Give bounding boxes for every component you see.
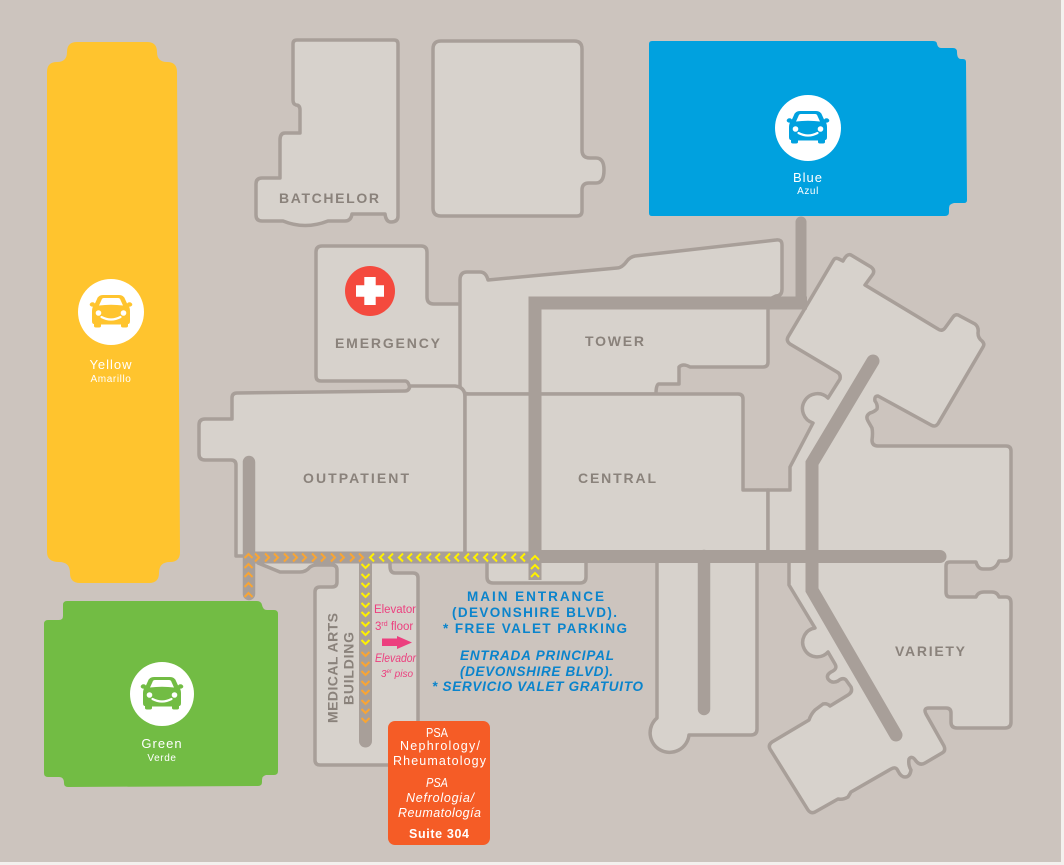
elevator directions: Elevator [374, 604, 416, 616]
callout: PSA suite: PSA [426, 776, 448, 790]
building: Tower [460, 240, 782, 394]
building: Central [465, 394, 768, 556]
callout: PSA suite: Nephrology/ [400, 739, 481, 753]
main entrance text: English: * FREE VALET PARKING [443, 621, 627, 636]
building: Batchelor [256, 40, 398, 226]
elevator directions: rd [381, 621, 388, 628]
main entrance text: English: MAIN ENTRANCE [467, 589, 604, 604]
parking: Green [44, 601, 278, 787]
parking: Blue [649, 41, 967, 216]
label: Amarillo: Amarillo [91, 374, 131, 385]
icon: yellow car [78, 279, 144, 345]
main entrance text: Spanish: * SERVICIO VALET GRATUITO [432, 679, 643, 694]
label: Green: Green [141, 736, 183, 751]
callout: PSA suite: Nefrologia/ [406, 791, 476, 805]
callout: PSA suite: Rheumatology [393, 754, 487, 768]
label: Azul: Azul [797, 186, 819, 197]
elevator directions [374, 604, 417, 680]
callout: PSA suite: Suite 304 [409, 827, 469, 841]
building: Variety [768, 255, 1011, 813]
building: Medical Arts [258, 556, 418, 765]
label: Variety: VARIETY [895, 643, 966, 659]
main entrance text: Spanish: (DEVONSHIRE BLVD). [460, 664, 613, 679]
label: Tower: TOWER [585, 333, 644, 349]
route chevrons: yellow [362, 554, 539, 644]
label: Outpatient: OUTPATIENT [303, 470, 409, 486]
label: Verde: Verde [147, 753, 177, 764]
label: Central: CENTRAL [578, 470, 656, 486]
elevator directions: piso [392, 669, 413, 680]
label: Blue: Blue [793, 170, 823, 185]
walkways [249, 222, 940, 741]
building: entrance pavilion [487, 560, 586, 583]
label: Medical Arts Building [324, 613, 356, 723]
parking: Yellow [47, 42, 180, 583]
route chevrons: orange [244, 554, 370, 722]
callout: PSA suite [388, 721, 490, 845]
elevator directions: floor [388, 621, 413, 633]
label: Medical Arts Building: MEDICAL ARTS [324, 613, 340, 723]
elevator directions: er [387, 669, 393, 675]
label: Emergency: EMERGENCY [335, 335, 441, 351]
elevator directions: Elevador [375, 653, 417, 665]
callout: PSA suite: Reumatología [398, 806, 481, 820]
icon: blue car [775, 95, 841, 161]
elevator directions: 3 [375, 621, 381, 633]
label: Medical Arts Building: BUILDING [340, 632, 356, 705]
main entrance text: Spanish: ENTRADA PRINCIPAL [460, 648, 614, 663]
icon: green car [130, 662, 194, 726]
icon: emergency cross [345, 266, 395, 316]
label: Yellow: Yellow [89, 357, 133, 372]
main entrance text: Spanish [432, 648, 643, 694]
main entrance text: English: (DEVONSHIRE BLVD). [452, 605, 617, 620]
building: unnamed north building [433, 41, 604, 216]
arrow: to elevator [382, 636, 412, 649]
callout: PSA suite: PSA [426, 726, 449, 740]
elevator directions: 3 [381, 669, 387, 680]
main entrance text: English [443, 589, 627, 636]
building: south wing [650, 560, 757, 752]
building: Outpatient [199, 386, 465, 556]
label: Batchelor: BATCHELOR [279, 190, 379, 206]
building: Emergency [316, 246, 462, 390]
